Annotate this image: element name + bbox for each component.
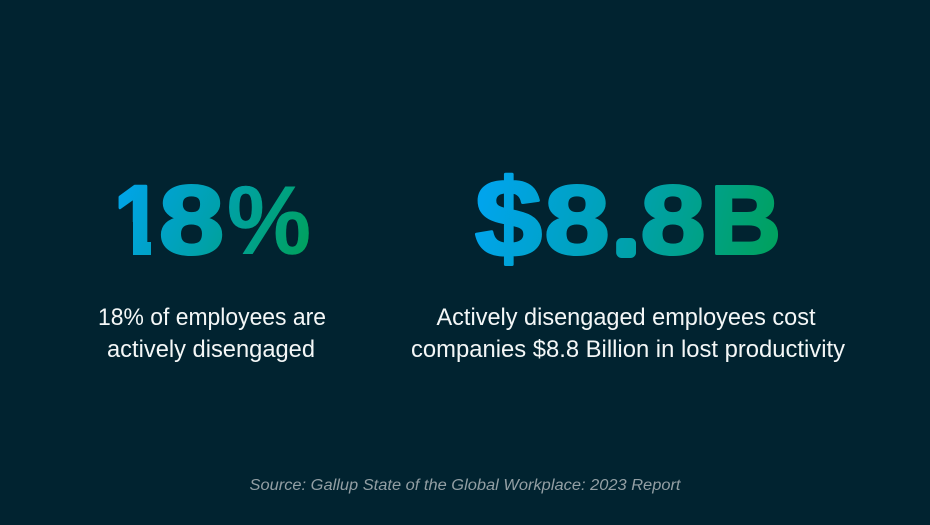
caption: $8.8B cost: Actively disengaged employees cost [436, 304, 816, 331]
caption: $8.8B cost [411, 304, 845, 363]
caption: 18% of employees: actively disengaged [107, 336, 315, 363]
statistic: $8.8B: . [618, 198, 635, 266]
statistic: $8.8B: B [710, 166, 781, 274]
statistic: $8.8B [475, 158, 781, 280]
statistic: $8.8B: 8 [544, 166, 610, 274]
statistic: $8.8B: 8 [640, 166, 706, 274]
caption: 18% of employees: 18% of employees are [98, 304, 326, 331]
caption: 18% of employees [98, 304, 326, 363]
source note: Source: Gallup State of the Global Workplace: 2023 Report [250, 477, 681, 494]
statistic: $8.8B: $ [475, 158, 542, 280]
statistic: 18% [118, 184, 309, 256]
statistic: 18%: 8 [159, 166, 224, 274]
statistic: 18%: 1 [114, 166, 162, 274]
caption: $8.8B cost: companies $8.8 Billion in lost productivity [411, 336, 845, 363]
statistic: 18%: % [227, 166, 311, 274]
